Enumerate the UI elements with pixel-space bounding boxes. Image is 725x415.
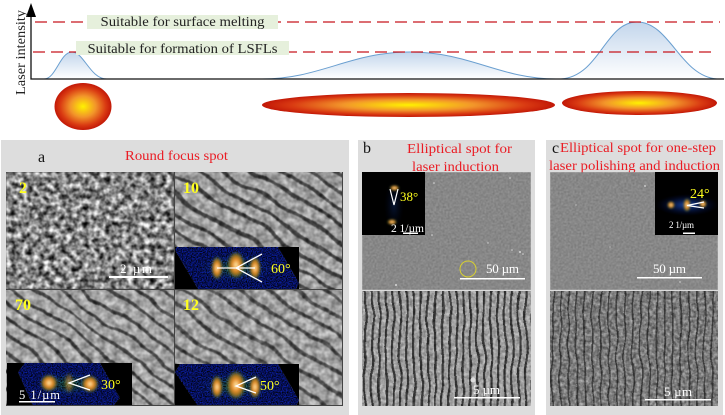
spot: wide ellipse — [262, 93, 555, 117]
panel b title: Elliptical spot for — [407, 142, 512, 157]
micrograph: 10 pulses — [175, 172, 342, 289]
threshold line: LSFL formation — [33, 51, 717, 53]
panel c title — [549, 141, 720, 174]
gaussian profile: round spot — [44, 52, 107, 79]
panel b title: laser induction — [412, 160, 499, 175]
micrograph: 2 pulses — [6, 172, 174, 289]
micrograph: b low magnification: 50 µm — [486, 261, 519, 276]
FFT inset: 50 degrees: 50° — [260, 379, 280, 394]
gaussian profile: narrow ellipse — [561, 22, 717, 79]
panel c title: Elliptical spot for one-step — [560, 141, 716, 156]
panel letter a: a — [38, 149, 45, 166]
label: surface melting: Suitable for surface melting — [100, 14, 265, 29]
panel letter c: c — [552, 140, 559, 157]
panel c title: laser polishing and induction — [549, 159, 720, 174]
micrograph: 2 pulses: 2 — [19, 180, 27, 197]
gaussian profile: wide ellipse — [262, 52, 556, 79]
micrograph: c high magnification — [550, 291, 718, 406]
panel c: elliptical spot for polishing and induction — [540, 140, 725, 415]
micrograph: 2 pulses: 2 µm — [120, 261, 152, 276]
micrograph: c low magnification — [550, 172, 718, 290]
spot: narrow ellipse — [562, 91, 717, 115]
FFT inset: 30 degrees: 30° — [101, 378, 121, 393]
FFT inset: 24 degrees — [655, 172, 718, 235]
FFT inset: 38 degrees: 2 1/µm — [391, 223, 424, 235]
threshold line: surface melting — [35, 21, 720, 23]
FFT inset: 38 degrees — [362, 172, 425, 235]
micrograph: b high magnification — [362, 291, 531, 406]
y axis label: Laser intensity — [13, 10, 28, 95]
panel letter b: b — [363, 140, 371, 157]
micrograph: c high magnification: 5 µm — [664, 384, 692, 399]
icon: axis arrow — [26, 3, 36, 17]
FFT inset: 60 degrees — [175, 247, 299, 289]
panel b: elliptical spot for laser induction — [352, 140, 541, 415]
FFT inset: 60 degrees: 60° — [271, 262, 291, 277]
micrograph: 70 pulses: 70 — [15, 297, 31, 314]
micrograph: b low magnification — [362, 172, 531, 290]
FFT inset: 30 degrees: 5 1/µm — [19, 388, 60, 402]
FFT inset: 24 degrees: 2 1/µm — [669, 220, 694, 230]
micrograph: b high magnification: 5 µm — [473, 382, 500, 397]
spot: round focus — [54, 83, 112, 130]
micrograph: 70 pulses — [6, 290, 174, 405]
chart: laser intensity profiles — [13, 3, 724, 95]
FFT inset: 30 degrees — [7, 363, 132, 406]
micrograph: c low magnification: 50 µm — [653, 261, 686, 276]
panel a: round focus spot — [0, 140, 352, 415]
panel a title: Round focus spot — [125, 149, 228, 164]
axes — [31, 12, 724, 79]
FFT inset: 24 degrees: 24° — [690, 187, 710, 202]
micrograph: 10 pulses: 10 — [183, 180, 199, 197]
micrograph: 12 pulses — [175, 290, 342, 405]
label: LSFL formation: Suitable for formation of LSFLs — [88, 41, 278, 56]
panel b title — [407, 142, 512, 175]
micrograph: 12 pulses: 12 — [183, 297, 199, 314]
FFT inset: 38 degrees: 38° — [400, 189, 418, 204]
FFT inset: 50 degrees — [175, 364, 299, 406]
